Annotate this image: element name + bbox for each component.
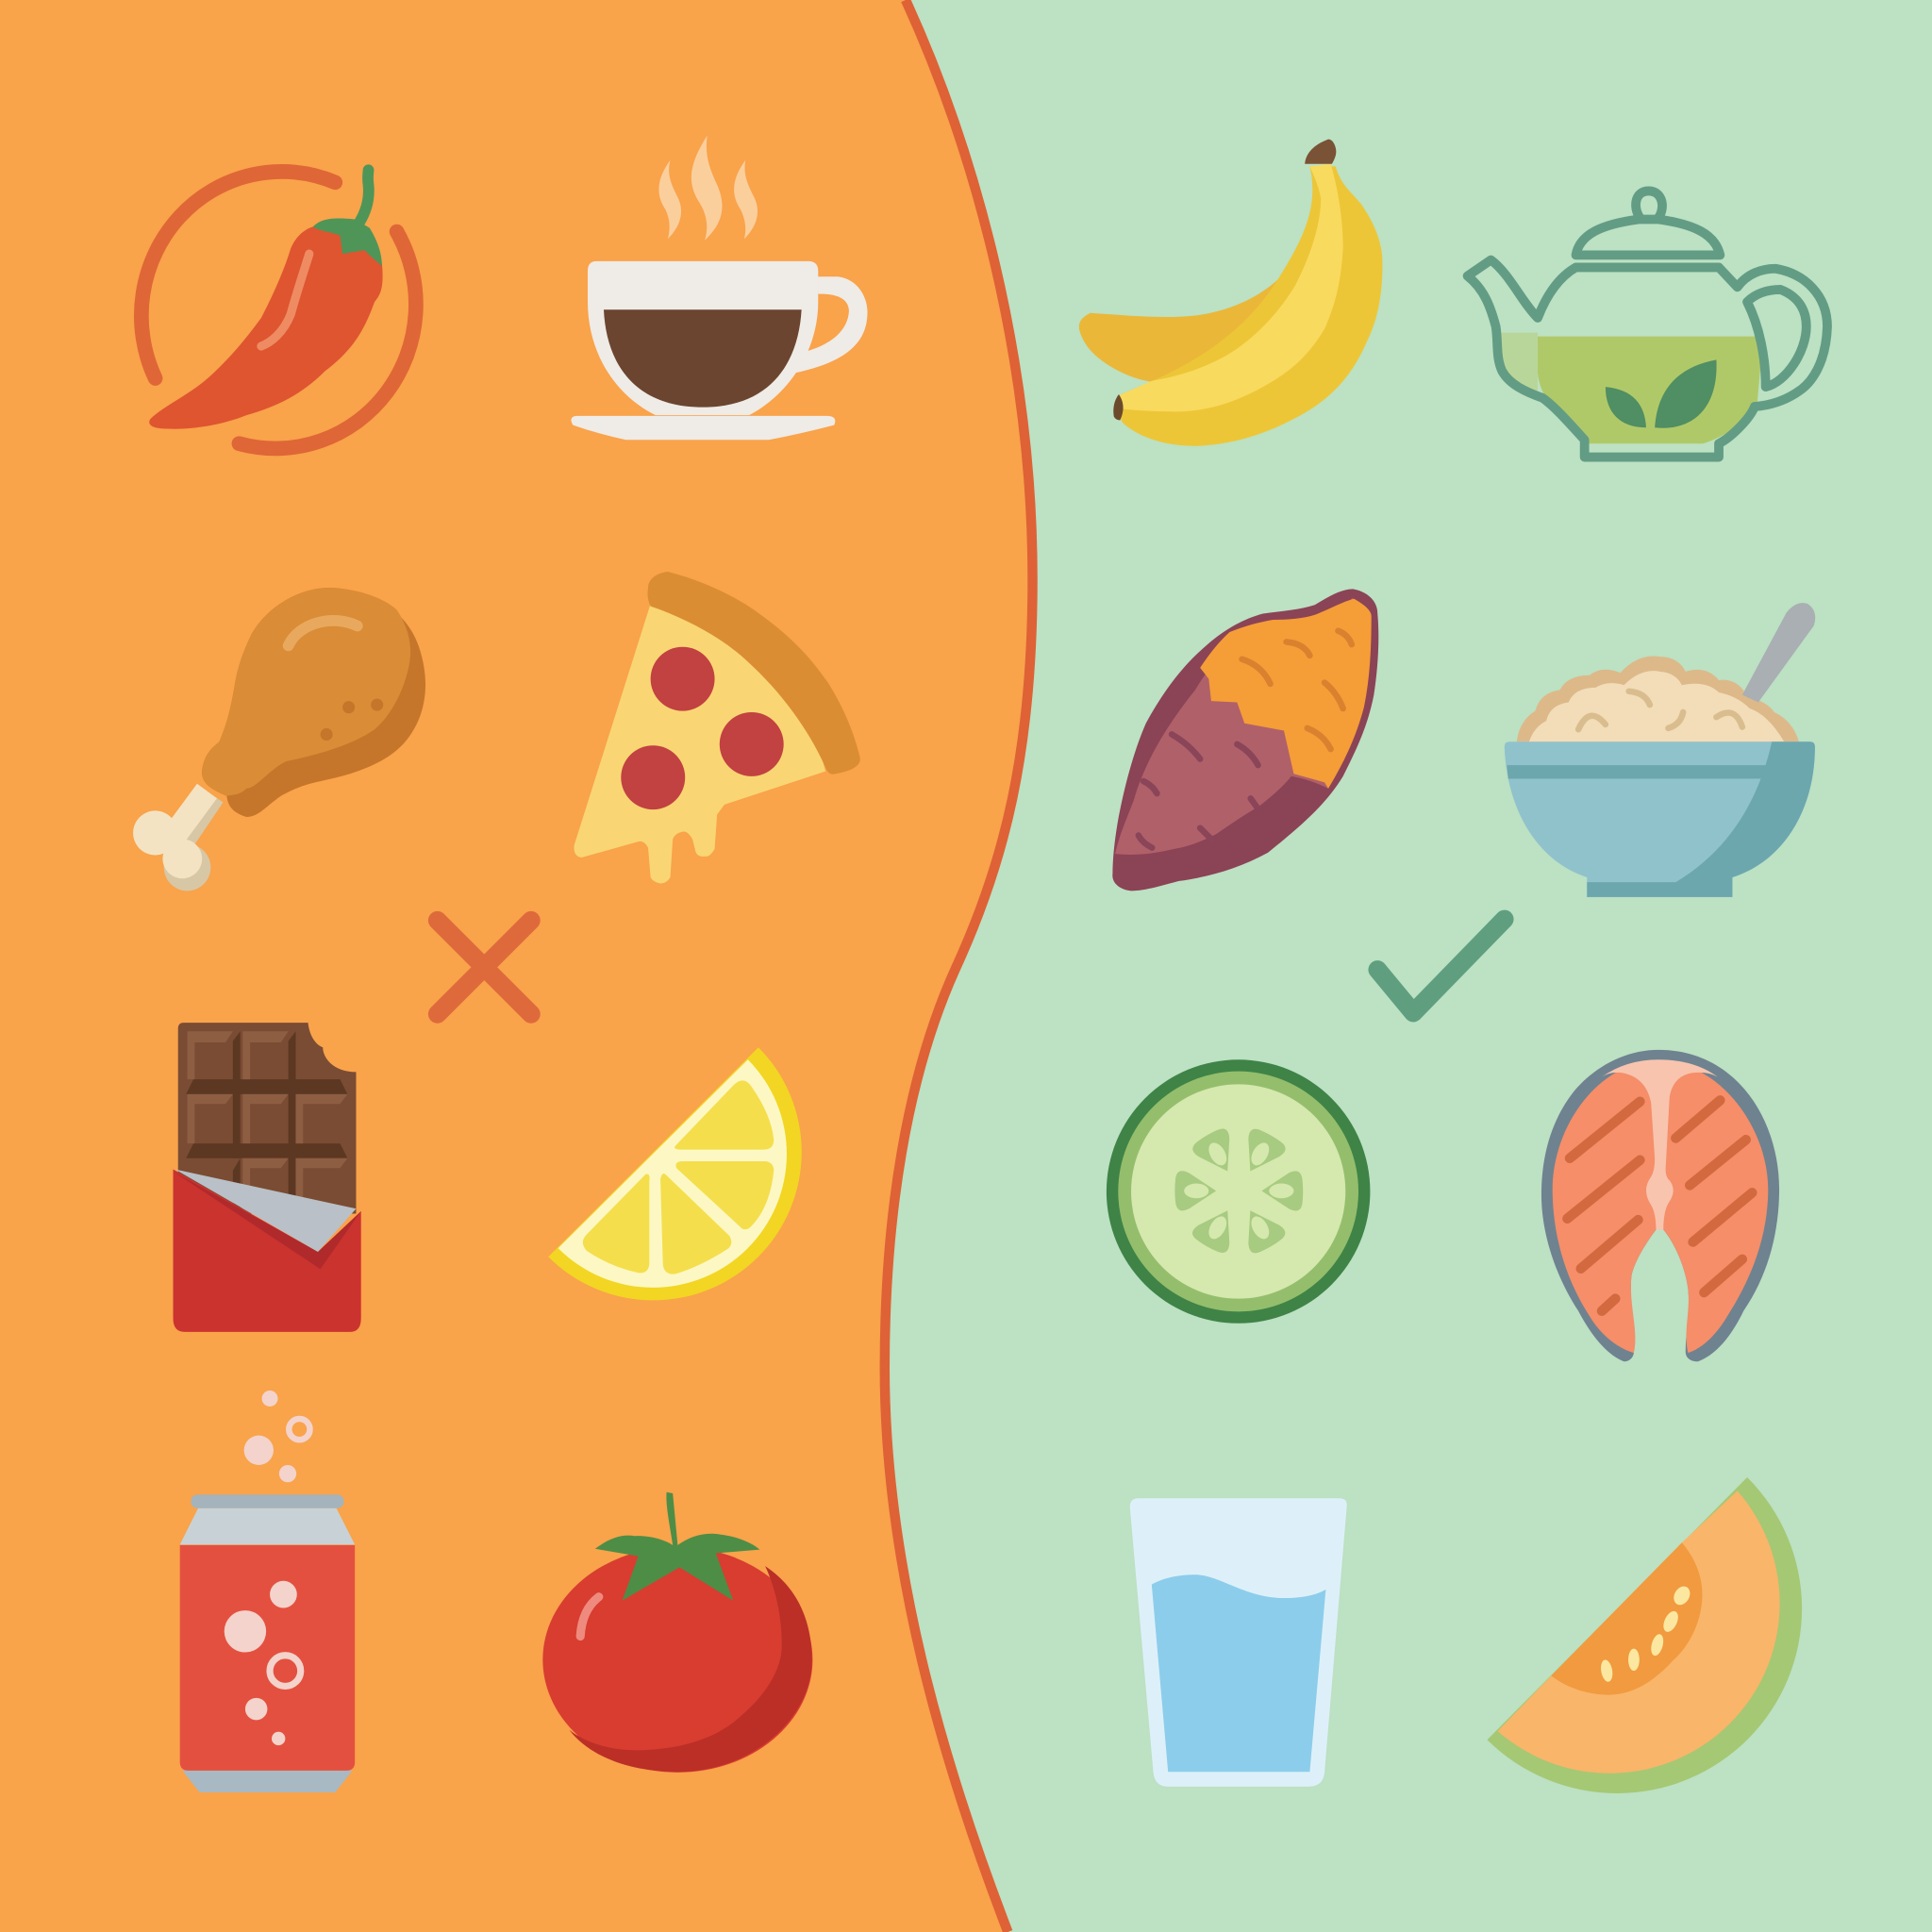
icon: tomato: [542, 1492, 812, 1773]
icon: pizza slice: [574, 572, 860, 883]
icon: green check mark: [1377, 919, 1505, 1013]
icon: bowl of oatmeal with spoon: [1505, 603, 1815, 897]
icon: soda can with bubbles: [180, 1391, 355, 1792]
icon: lemon wedge: [548, 1047, 802, 1300]
icon: red X mark: [438, 921, 531, 1014]
icon: fried chicken drumstick: [133, 588, 425, 891]
icon: cantaloupe melon slice: [1487, 1477, 1802, 1793]
icon: glass of water: [1130, 1498, 1347, 1787]
icon: banana: [1079, 140, 1382, 446]
wavy divider: [885, 0, 1033, 1932]
icon: chili pepper in broken circle: [142, 170, 416, 448]
icon: coffee cup with steam: [571, 136, 868, 440]
icon: chocolate bar with wrapper: [174, 1023, 361, 1332]
icon: salmon steak: [1541, 1050, 1779, 1361]
icon: baked sweet potato: [1112, 589, 1378, 891]
icon: cucumber slice: [1107, 1059, 1370, 1324]
panel: orange foods to avoid background: [0, 0, 1033, 1932]
icon: teapot with green tea: [1468, 191, 1827, 458]
